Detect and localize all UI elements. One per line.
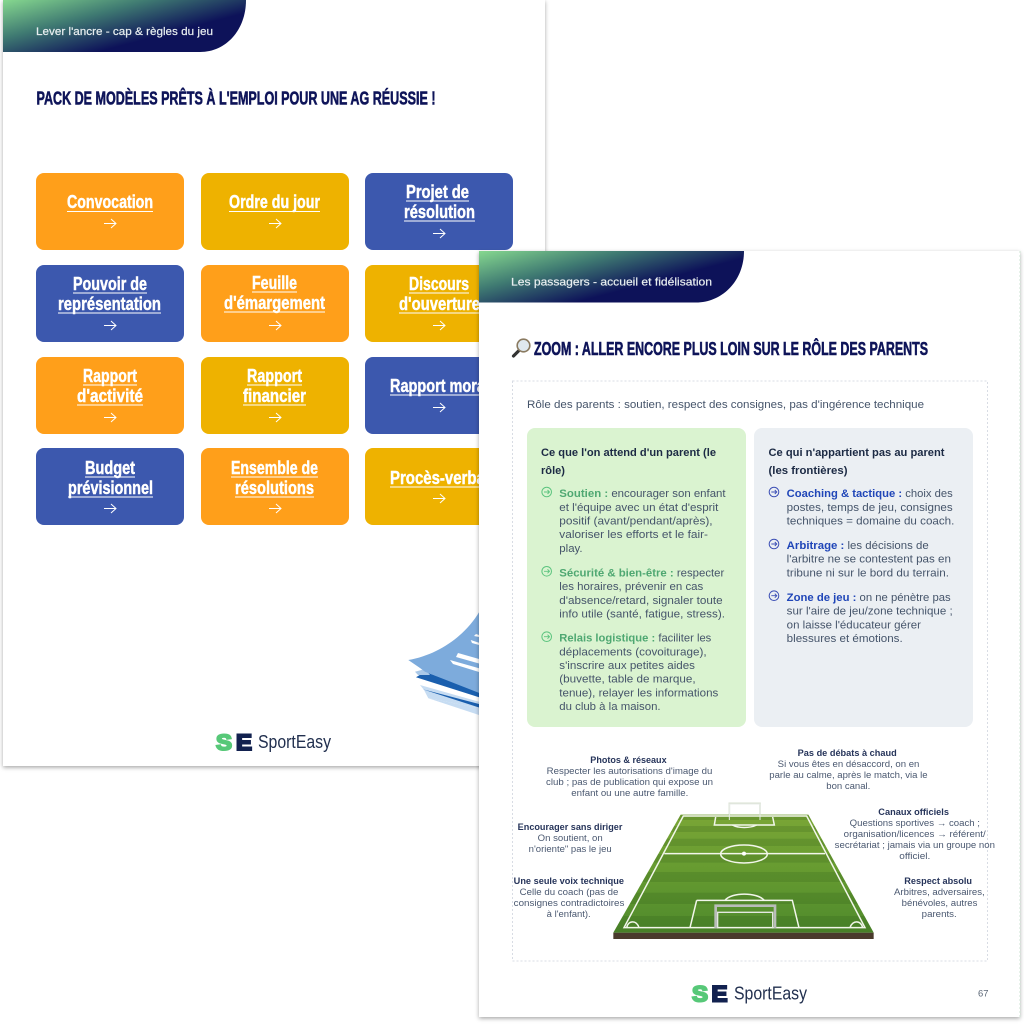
- item: Arbitrage: [769, 539, 951, 579]
- item: Relais logistique: [542, 632, 719, 713]
- panel: page 1 templates pack: [3, 0, 545, 766]
- icon: magnifying glass: [514, 339, 530, 356]
- card: Rapport financier: Rapport: [247, 366, 302, 386]
- item: Relais logistique: du club à la maison.: [559, 701, 661, 713]
- item: Sécurité et bien-être: Sécurité & bien-être : respecter: [559, 568, 725, 580]
- subtitle: Rôle des parents : soutien, respect des consignes, pas d'ingérence technique: [527, 399, 924, 411]
- item: Relais logistique: (buvette, table de marque,: [559, 674, 696, 686]
- item: Soutien: Soutien : encourager son enfant: [559, 488, 726, 500]
- page 2 tab: [479, 251, 744, 302]
- callout: Une seule voix technique: consignes contradictoires: [514, 898, 625, 908]
- card: Discours d'ouverture: Discours: [409, 274, 469, 294]
- logo: SportEasy page 1: [216, 730, 331, 755]
- card: Ensemble de résolutions: résolutions: [235, 478, 314, 498]
- dashed content frame: [512, 381, 988, 961]
- callout: Pas de débats à chaud: parle au calme, après le match, via le: [769, 770, 928, 780]
- callout: Photos et réseaux: club ; pas de publication qui expose un: [546, 777, 713, 787]
- page 2 tab: Les passagers - accueil et fidélisation: [511, 276, 712, 288]
- item: Relais logistique: Relais logistique : faciliter les: [559, 633, 712, 645]
- item: Soutien: play.: [559, 543, 583, 555]
- callout: Photos et réseaux: [546, 755, 713, 798]
- illustration: football pitch: [605, 803, 885, 939]
- green panel heading: [541, 447, 716, 477]
- card: Rapport d'activité: [36, 357, 184, 434]
- callout: Encourager sans diriger: Encourager sans diriger: [518, 822, 623, 832]
- callout: Canaux officiels: officiel.: [899, 851, 930, 861]
- card: Rapport d'activité: Rapport: [83, 366, 137, 386]
- callout: Pas de débats à chaud: Pas de débats à chaud: [798, 748, 897, 758]
- callout: Respect absolu: [894, 876, 985, 919]
- callout: Pas de débats à chaud: [769, 748, 928, 791]
- item: Zone de jeu: [769, 591, 953, 645]
- callout: Respect absolu: Respect absolu: [904, 876, 972, 886]
- callout: Encourager sans diriger: [518, 822, 623, 854]
- card: Projet de résolution: résolution: [404, 202, 475, 222]
- card: Rapport financier: [201, 357, 349, 434]
- card: Rapport financier: financier: [243, 386, 306, 406]
- callout: Canaux officiels: [835, 807, 995, 861]
- page 1 tab: Lever l'ancre - cap & règles du jeu: [36, 26, 213, 38]
- item: Sécurité et bien-être: info utile (santé, fatigue, stress).: [559, 608, 725, 620]
- card: Ordre du jour: Ordre du jour: [229, 192, 320, 212]
- grey panel heading: (les frontières): [768, 465, 848, 477]
- logo: SportEasy page 1: E: [236, 730, 252, 755]
- logo: SportEasy page 2: S: [692, 982, 708, 1006]
- page 1 tab: [3, 0, 246, 52]
- callout: Canaux officiels: secrétariat ; jamais via un groupe non: [835, 840, 995, 850]
- card: Ordre du jour: [201, 173, 349, 250]
- callout: Canaux officiels: Questions sportives → coach ;: [850, 818, 980, 828]
- item: Zone de jeu: on laisse l'éducateur gérer: [787, 619, 921, 631]
- item: Zone de jeu: blessures et émotions.: [787, 633, 903, 645]
- callout: Photos et réseaux: Respecter les autorisations d'image du: [547, 766, 712, 776]
- callout: Respect absolu: parents.: [922, 909, 957, 919]
- item: Coaching et tactique: postes, temps de jeu, consignes: [787, 502, 953, 514]
- callout: Une seule voix technique: Une seule voix technique: [514, 876, 624, 886]
- green panel heading: rôle): [541, 465, 565, 477]
- card: Pouvoir de représentation: Pouvoir de: [73, 274, 147, 294]
- callout: Une seule voix technique: Celle du coach (pas de: [520, 887, 618, 897]
- logo: SportEasy page 1: S: [216, 730, 232, 755]
- card: Rapport moral: [365, 357, 513, 434]
- callout: Canaux officiels: Canaux officiels: [878, 807, 949, 817]
- card: Feuille d'émargement: d'émargement: [224, 293, 325, 313]
- item: Zone de jeu: sur l'aire de jeu/zone technique ;: [787, 606, 953, 618]
- callout: Photos et réseaux: enfant ou une autre famille.: [571, 788, 688, 798]
- card: Procès-verbal: Procès-verbal: [390, 468, 489, 488]
- callout: Pas de débats à chaud: Si vous êtes en désaccord, on en: [778, 759, 919, 769]
- callout: Encourager sans diriger: n'oriente" pas le jeu: [529, 844, 612, 854]
- green panel heading: Ce que l'on attend d'un parent (le: [541, 447, 716, 459]
- card: Discours d'ouverture: [365, 265, 513, 342]
- callout: Une seule voix technique: [514, 876, 625, 919]
- card: Projet de résolution: Projet de: [406, 182, 469, 202]
- logo: SportEasy page 2: [692, 982, 807, 1006]
- card: Ensemble de résolutions: [201, 448, 349, 525]
- card: Pouvoir de représentation: [36, 265, 184, 342]
- page 1 heading: PACK DE MODÈLES PRÊTS À L'EMPLOI POUR UNE AG RÉUSSIE !: [36, 88, 436, 108]
- card: Projet de résolution: [365, 173, 513, 250]
- callout: Canaux officiels: organisation/licences → référent/: [844, 829, 986, 839]
- item: Relais logistique: s'inscrire aux petites aides: [559, 660, 696, 672]
- card: Ensemble de résolutions: Ensemble de: [231, 458, 318, 478]
- logo: SportEasy page 2: SportEasy: [734, 984, 807, 1004]
- grey panel heading: [768, 447, 945, 477]
- item: Zone de jeu: Zone de jeu : on ne pénètre pas: [787, 592, 951, 604]
- callout: Photos et réseaux: Photos & réseaux: [590, 755, 667, 765]
- item: Soutien: [542, 487, 726, 555]
- callout: Pas de débats à chaud: bon canal.: [826, 781, 870, 791]
- item: Sécurité et bien-être: les horaires, prévenir en cas: [559, 581, 704, 593]
- callout: Une seule voix technique: à l'enfant).: [547, 909, 591, 919]
- card: Convocation: Convocation: [67, 192, 153, 212]
- item: Coaching et tactique: techniques = domaine du coach.: [787, 516, 954, 528]
- item: Sécurité et bien-être: [542, 566, 725, 620]
- item: Arbitrage: tribune ni sur le bord du terrain.: [787, 567, 949, 579]
- card: Budget prévisionnel: [36, 448, 184, 525]
- card: Rapport moral: Rapport moral: [390, 376, 489, 396]
- logo: SportEasy page 2: E: [712, 982, 728, 1006]
- panel: parent's role (green): [527, 428, 746, 727]
- item: Coaching et tactique: Coaching & tactique : choix des: [787, 488, 953, 500]
- card: Procès-verbal: [365, 448, 513, 525]
- logo: SportEasy page 1: SportEasy: [258, 732, 331, 752]
- item: Sécurité et bien-être: d'absence/retard, signaler toute: [559, 595, 723, 607]
- card: Feuille d'émargement: Feuille: [252, 273, 297, 293]
- item: Relais logistique: tenue), relayer les informations: [559, 687, 719, 699]
- icon: stack of documents: [408, 612, 479, 715]
- card: Budget prévisionnel: prévisionnel: [68, 478, 153, 498]
- callout: Encourager sans diriger: On soutient, on: [538, 833, 603, 843]
- item: Relais logistique: déplacements (covoiturage),: [559, 646, 707, 658]
- card: Rapport d'activité: d'activité: [77, 386, 143, 406]
- item: Arbitrage: l'arbitre ne se contestent pas en: [787, 554, 951, 566]
- card: Discours d'ouverture: d'ouverture: [399, 294, 480, 314]
- item: Soutien: positif (avant/pendant/après),: [559, 516, 713, 528]
- panel: page 2 role of parents: [479, 251, 1020, 1017]
- page number: 67: [978, 989, 988, 1000]
- item: Soutien: valoriser les efforts et le fair-: [559, 529, 708, 541]
- callout: Respect absolu: Arbitres, adversaires,: [894, 887, 985, 897]
- item: Arbitrage: Arbitrage : les décisions de: [787, 540, 929, 552]
- card: Budget prévisionnel: Budget: [85, 458, 135, 478]
- item: Soutien: et l'équipe avec un état d'esprit: [559, 502, 718, 514]
- card: Feuille d'émargement: [201, 265, 349, 342]
- grey panel heading: Ce qui n'appartient pas au parent: [768, 447, 945, 459]
- item: Coaching et tactique: [769, 487, 954, 528]
- panel: parent's boundaries (grey): [754, 428, 973, 727]
- callout: Respect absolu: bénévoles, autres: [902, 898, 978, 908]
- card: Pouvoir de représentation: représentation: [58, 294, 161, 314]
- card: Convocation: [36, 173, 184, 250]
